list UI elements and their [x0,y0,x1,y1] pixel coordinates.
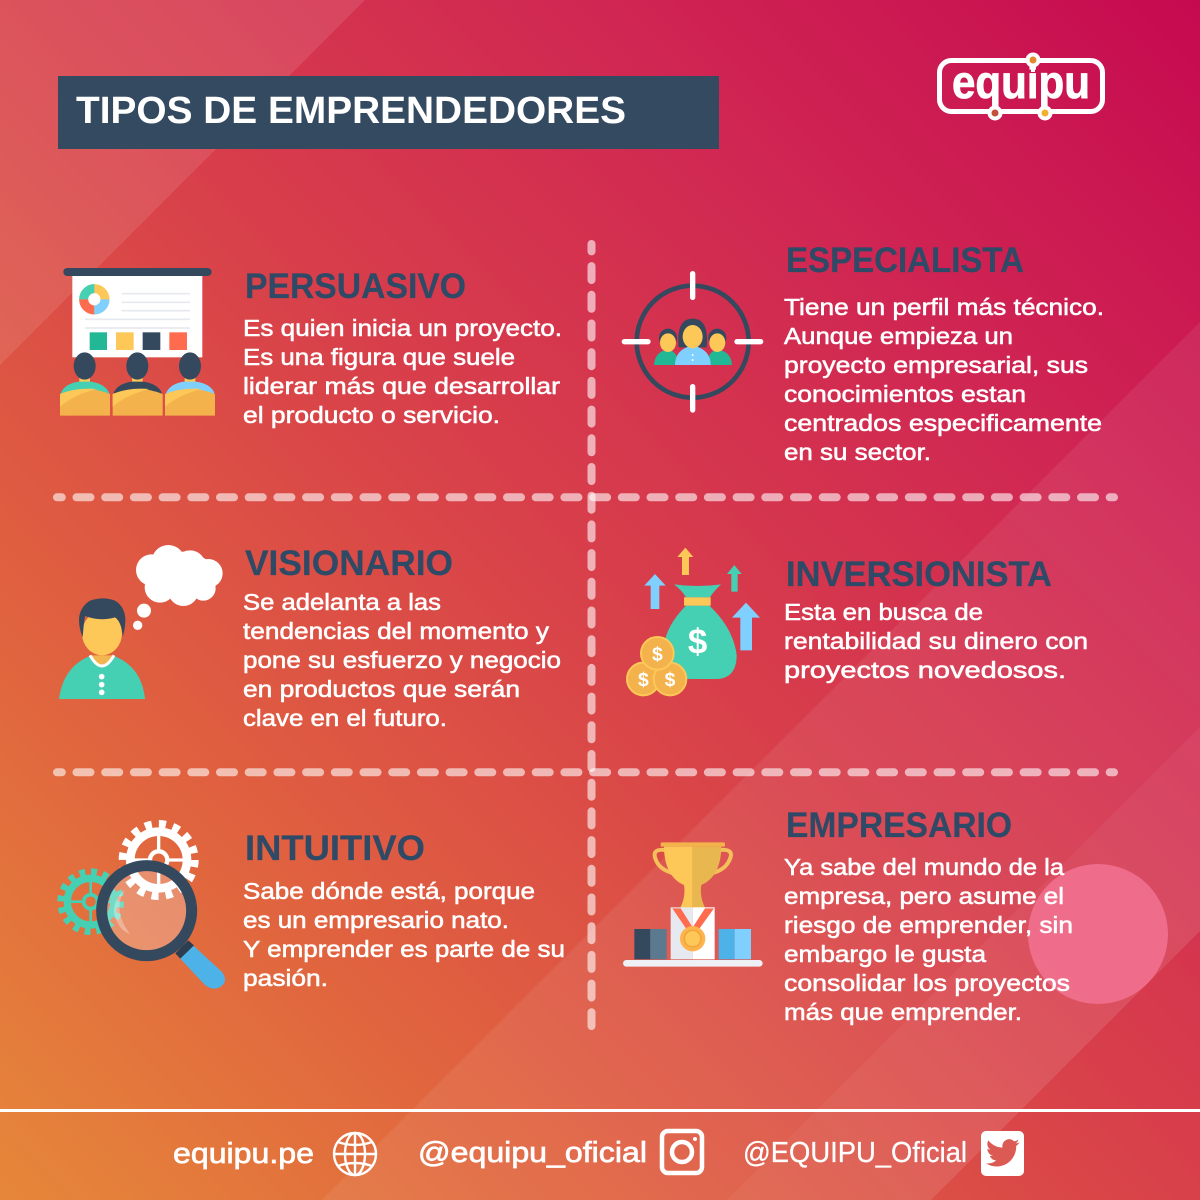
title banner: TIPOS DE EMPRENDEDORES [76,90,626,132]
icon: gears and magnifier [61,824,225,989]
panel: intuitivo [61,824,565,991]
description: Aunque empieza un [784,323,1013,349]
description: Sabe dónde está, porque [243,878,535,904]
description: consolidar los proyectos [784,970,1070,996]
description: conocimientos estan [784,381,1026,407]
title banner [58,76,719,149]
heading: EMPRESARIO [786,806,1012,845]
pink decorative circle [1028,864,1168,1004]
icon: presentation screen with audience [60,268,215,416]
description: Ya sabe del mundo de la [784,854,1064,880]
heading: ESPECIALISTA [786,241,1024,280]
description: pone su esfuerzo y negocio [243,647,561,673]
description: Tiene un perfil más técnico. [784,294,1104,320]
description: Es quien inicia un proyecto. [243,315,562,341]
panel: empresario [626,806,1073,1025]
description [243,589,561,731]
icon: money bag with coins and arrows: $ [665,670,676,691]
description: proyectos novedosos. [784,657,1066,683]
heading: VISIONARIO [245,544,453,583]
heading: INTUITIVO [245,829,425,868]
description: en productos que serán [243,676,520,702]
icon: money bag with coins and arrows: $ [688,622,707,661]
icon: person thinking with cloud [59,545,223,699]
panel: persuasivo [60,267,562,428]
description: liderar más que desarrollar [243,373,560,399]
panel: visionario [59,544,561,731]
panel: especialista [624,241,1104,465]
description [784,854,1073,1025]
icon: money bag with coins and arrows: $ [652,644,663,665]
description: empresa, pero asume el [784,883,1064,909]
icon: instagram [662,1131,702,1173]
description: es un empresario nato. [243,907,509,933]
logo: equipu: equipu [952,56,1090,108]
icon: target on team [624,274,761,410]
panel: inversionista [627,548,1088,695]
description: rentabilidad su dinero con [784,628,1088,654]
description: Esta en busca de [784,599,983,625]
description: centrados especificamente [784,410,1102,436]
icon: money bag with coins and arrows: $ [638,670,649,691]
description [784,294,1104,465]
heading: PERSUASIVO [245,267,466,306]
description [243,315,562,428]
instagram handle: @equipu_oficial [418,1137,647,1169]
description: Y emprender es parte de su [243,936,565,962]
description: pasión. [243,965,328,991]
description: riesgo de emprender, sin [784,912,1073,938]
twitter handle: @EQUIPU_Oficial [743,1137,967,1169]
description [784,599,1088,683]
description: Es una figura que suele [243,344,515,370]
description [243,878,565,991]
description: tendencias del momento y [243,618,550,644]
description: embargo le gusta [784,941,986,967]
heading: INVERSIONISTA [786,555,1052,594]
description: en su sector. [784,439,931,465]
website: equipu.pe [173,1138,314,1170]
description: el producto o servicio. [243,402,500,428]
icon: trophy and medal podium [626,842,759,963]
footer [173,1131,1024,1176]
description: proyecto empresarial, sus [784,352,1088,378]
description: más que emprender. [784,999,1022,1025]
description: Se adelanta a las [243,589,441,615]
icon: globe [334,1133,376,1175]
icon: money bag with coins and arrows [627,548,760,695]
icon: twitter [981,1131,1024,1176]
description: clave en el futuro. [243,705,447,731]
